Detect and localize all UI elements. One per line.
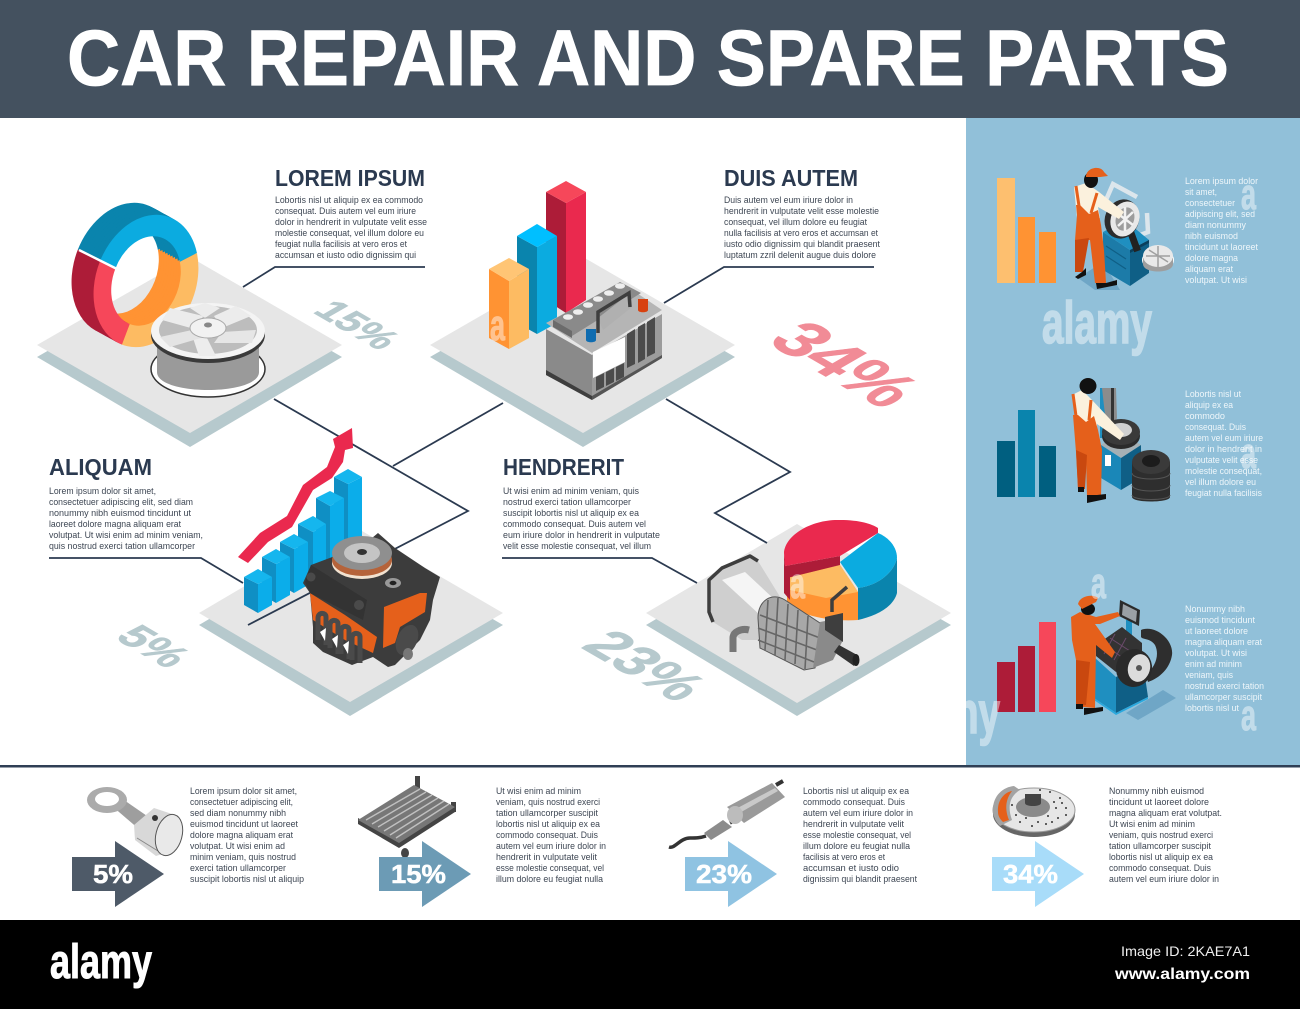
text: mechanic 3: Nonummy nibh — [1185, 604, 1245, 615]
platform: top left — [37, 257, 342, 447]
text block: magna aliquam erat volutpat. — [1109, 808, 1222, 819]
text block: duis autem — [724, 195, 880, 261]
percent: 15%: 15% — [304, 295, 409, 356]
text block: illum dolore eu feugiat nulla — [803, 841, 911, 852]
text: mechanic 1: tincidunt ut laoreet — [1185, 242, 1258, 253]
text block: veniam, quis nostrud exerci — [1109, 830, 1213, 841]
icon: engine — [303, 533, 440, 667]
icon: alloy wheel — [151, 303, 265, 397]
heading: aliquam: ALIQUAM — [49, 454, 152, 480]
text block: lorem ipsum: accumsan et iusto odio dignissim qui — [275, 250, 416, 261]
chart: 3D pie — [784, 520, 897, 620]
text block: hendrerit: commodo consequat. Duis autem vel — [503, 519, 646, 530]
text block: hendrerit: velit esse molestie consequat, vel illum — [503, 541, 651, 552]
panel: mechanic 1 row — [997, 168, 1258, 290]
text block: aliquam: nonummy nibh euismod tincidunt ut — [49, 508, 191, 519]
value: 5%: 5% — [93, 859, 133, 889]
text block — [803, 786, 917, 885]
text block: euismod tincidunt ut laoreet — [190, 819, 298, 830]
text: mechanic 2: consequat. Duis — [1185, 422, 1246, 433]
text: mechanic 3: volutpat. Ut wisi — [1185, 648, 1247, 659]
text block: duis autem: iusto odio dignissim qui blandit praesent — [724, 239, 880, 250]
text block: aliquam: quis nostrud exerci tation ullamcorper — [49, 541, 195, 552]
text: mechanic 2: Lobortis nisl ut — [1185, 389, 1241, 400]
text block: commodo consequat. Duis — [1109, 863, 1211, 874]
watermark marks: a — [1241, 691, 1256, 740]
text block: duis autem: Duis autem vel eum iriure dolor in — [724, 195, 853, 206]
text block: esse molestie consequat, vel — [803, 830, 911, 841]
bottom strip divider — [0, 765, 1300, 768]
text: mechanic 1: consectetuer — [1185, 198, 1235, 209]
watermark marks: a — [490, 301, 505, 350]
icon: mechanic with balancing machine — [1071, 596, 1176, 720]
text block: duis autem: consequat, vel illum dolore eu feugiat — [724, 217, 867, 228]
text block: hendrerit: eum iriure dolor in hendrerit in vulputate — [503, 530, 660, 541]
watermark marks: a — [1091, 559, 1106, 608]
text: mechanic 2: aliquip ex ea — [1185, 400, 1234, 411]
arrow: 23% — [685, 841, 777, 907]
text: mechanic 3: ut laoreet dolore — [1185, 626, 1248, 637]
arrow: 5% — [72, 841, 164, 907]
panel: mechanic 2 row — [997, 378, 1263, 503]
watermark marks: a — [1241, 170, 1256, 219]
text block: lorem ipsum — [275, 195, 427, 261]
text: mechanic 3: lobortis nisl ut — [1185, 703, 1239, 714]
icon: red trend arrow — [238, 428, 353, 563]
text block: commodo consequat. Duis — [803, 797, 905, 808]
text block: commodo consequat. Duis — [496, 830, 598, 841]
text block: lorem ipsum: molestie consequat, vel illum dolore eu — [275, 228, 424, 239]
icon: gearbox transmission — [709, 556, 860, 670]
text block: volutpat. Ut wisi enim ad — [190, 841, 285, 852]
heading: duis autem: DUIS AUTEM — [724, 165, 858, 191]
text block: autem vel eum iriure dolor in — [803, 808, 913, 819]
text block: duis autem: hendrerit in vulputate velit esse molestie — [724, 206, 879, 217]
watermark marks — [490, 170, 1256, 746]
chart: 3D bars — [489, 181, 586, 349]
text block — [1109, 786, 1222, 885]
text block: Nonummy nibh euismod — [1109, 786, 1204, 797]
heading: hendrerit: HENDRERIT — [503, 454, 624, 480]
percent: 5%: 5% — [105, 619, 201, 674]
footer bar: www.alamy.com — [1114, 966, 1250, 983]
chart: blue rising bars — [244, 469, 362, 613]
text block: aliquam: volutpat. Ut wisi enim ad minim veniam, — [49, 530, 203, 541]
bar chart: blue — [997, 410, 1056, 497]
icon: mechanic with tyre changer — [1072, 378, 1170, 503]
text block: Ut wisi enim ad minim — [496, 786, 581, 797]
item: brake disc 34% — [992, 786, 1222, 907]
watermark marks: a — [1241, 429, 1256, 478]
text block: minim veniam, quis nostrud — [190, 852, 296, 863]
footer bar — [0, 920, 1300, 1009]
text: mechanic 3: enim ad minim — [1185, 659, 1242, 670]
text block: veniam, quis nostrud exerci — [496, 797, 600, 808]
text block: hendrerit: nostrud exerci tation ullamcorper — [503, 497, 631, 508]
text block: tation ullamcorper suscipit — [496, 808, 598, 819]
arrow: 15% — [379, 841, 471, 907]
text block: hendrerit in vulputate velit — [803, 819, 904, 830]
value: 23%: 23% — [696, 859, 752, 889]
text block: lorem ipsum: consequat. Duis autem vel eum iriure — [275, 206, 416, 217]
platform: bottom left — [199, 524, 503, 716]
text block: dolore magna aliquam erat — [190, 830, 293, 841]
text: mechanic 3: magna aliquam erat — [1185, 637, 1262, 648]
title banner: CAR REPAIR AND SPARE PARTS — [67, 13, 1229, 102]
text: mechanic 2: commodo — [1185, 411, 1225, 422]
text block: autem vel eum iriure dolor in — [1109, 874, 1219, 885]
text: mechanic 2: vulputate velit esse — [1185, 455, 1258, 466]
footer bar: alamy — [50, 936, 152, 989]
text block — [496, 786, 606, 885]
text: mechanic 3: veniam, quis — [1185, 670, 1233, 681]
text block: esse molestie consequat, vel — [496, 863, 604, 874]
text: mechanic 1: sit amet, — [1185, 187, 1217, 198]
text block: hendrerit: suscipit lobortis nisl ut aliquip ex ea — [503, 508, 640, 519]
text: mechanic 2: autem vel eum iriure — [1185, 433, 1263, 444]
text block: aliquam: consectetuer adipiscing elit, sed diam — [49, 497, 193, 508]
arrow: 34% — [992, 841, 1084, 907]
text block: aliquam — [49, 486, 203, 552]
text: mechanic 1: aliquam erat — [1185, 264, 1233, 275]
value: 15%: 15% — [391, 859, 446, 889]
text block: lorem ipsum: dolor in hendrerit in vulputate velit esse — [275, 217, 427, 228]
text block: Ut wisi enim ad minim — [1109, 819, 1195, 830]
text: mechanic 3: euismod tincidunt — [1185, 615, 1255, 626]
percent: 23%: 23% — [570, 621, 721, 709]
text block: lorem ipsum: Lobortis nisl ut aliquip ex ea commodo — [275, 195, 423, 206]
text block: suscipit lobortis nisl ut aliquip — [190, 874, 304, 885]
text block: consectetuer adipiscing elit, — [190, 797, 293, 808]
text: mechanic 2: dolor in hendrerit in — [1185, 444, 1262, 455]
text block — [190, 786, 304, 885]
item: piston 5% — [72, 786, 304, 907]
watermark marks: alamy — [1042, 290, 1152, 356]
text: mechanic 2: vel illum dolore eu — [1185, 477, 1256, 488]
chart: 3D ring — [54, 188, 216, 362]
icon: brake disc — [993, 786, 1075, 837]
watermark marks: ny — [955, 680, 1000, 746]
text block: hendrerit — [503, 486, 660, 552]
icon: piston — [87, 787, 187, 859]
bar chart: orange — [997, 178, 1056, 283]
text block: duis autem: nulla facilisis at vero eros et accumsan et — [724, 228, 878, 239]
text block: aliquam: laoreet dolore magna aliquam erat — [49, 519, 181, 530]
footer bar: Image ID: 2KAE7A1 — [1121, 943, 1250, 959]
text: mechanic 1: nibh euismod — [1185, 231, 1238, 242]
text: mechanic 3: ullamcorper suscipit — [1185, 692, 1262, 703]
text block: hendrerit: Ut wisi enim ad minim veniam, quis — [503, 486, 639, 497]
text block: autem vel eum iriure dolor in — [496, 841, 606, 852]
text block: Lorem ipsum dolor sit amet, — [190, 786, 297, 797]
panel: mechanic 3 row — [997, 596, 1264, 720]
text: mechanic 2: feugiat nulla facilisis — [1185, 488, 1262, 499]
text: mechanic 1: Lorem ipsum dolor — [1185, 176, 1258, 187]
text block: aliquam: Lorem ipsum dolor sit amet, — [49, 486, 156, 497]
text block: lorem ipsum: feugiat nulla facilisis at vero eros et — [275, 239, 407, 250]
text: mechanic 2: molestie consequat, — [1185, 466, 1262, 477]
text block: dignissim qui blandit praesent — [803, 874, 917, 885]
text block: sed diam nonummy nibh — [190, 808, 286, 819]
text block: tation ullamcorper suscipit — [1109, 841, 1211, 852]
text block: facilisis at vero eros et — [803, 852, 885, 863]
text block: exerci tation ullamcorper — [190, 863, 286, 874]
text: mechanic 1: volutpat. Ut wisi — [1185, 275, 1247, 286]
connector lines — [49, 267, 874, 625]
item: muffler 23% — [669, 781, 917, 907]
icon: radiator — [358, 776, 456, 858]
icon: mechanic with wheel balancer — [1074, 168, 1174, 290]
bar chart: red — [997, 622, 1056, 712]
text block: duis autem: luptatum zzril delenit augue duis dolore — [724, 250, 876, 261]
icon: muffler — [669, 781, 785, 847]
heading: lorem ipsum: LOREM IPSUM — [275, 165, 425, 191]
text block: lobortis nisl ut aliquip ex ea — [1109, 852, 1214, 863]
platform: top middle — [430, 257, 735, 447]
text block: lobortis nisl ut aliquip ex ea — [496, 819, 601, 830]
text: mechanic 1: diam nonummy — [1185, 220, 1246, 231]
text block: illum dolore eu feugiat nulla — [496, 874, 604, 885]
text block: tincidunt ut laoreet dolore — [1109, 797, 1209, 808]
platform: bottom right — [646, 524, 951, 716]
text: mechanic 1 — [1185, 176, 1258, 286]
text: mechanic 3 — [1185, 604, 1264, 714]
watermark marks: a — [790, 559, 805, 608]
text: mechanic 1: adipiscing elit, sed — [1185, 209, 1255, 220]
text block: hendrerit in vulputate velit — [496, 852, 597, 863]
percent: 34%: 34% — [753, 311, 937, 418]
text: mechanic 3: nostrud exerci tation — [1185, 681, 1264, 692]
icon: car battery — [546, 282, 662, 400]
text block: accumsan et iusto odio — [803, 863, 899, 874]
text: mechanic 1: dolore magna — [1185, 253, 1239, 264]
text: mechanic 2 — [1185, 389, 1263, 499]
value: 34%: 34% — [1003, 859, 1058, 889]
item: radiator 15% — [358, 776, 606, 907]
text block: Lobortis nisl ut aliquip ex ea — [803, 786, 910, 797]
panel: blue sidebar background — [966, 118, 1300, 765]
